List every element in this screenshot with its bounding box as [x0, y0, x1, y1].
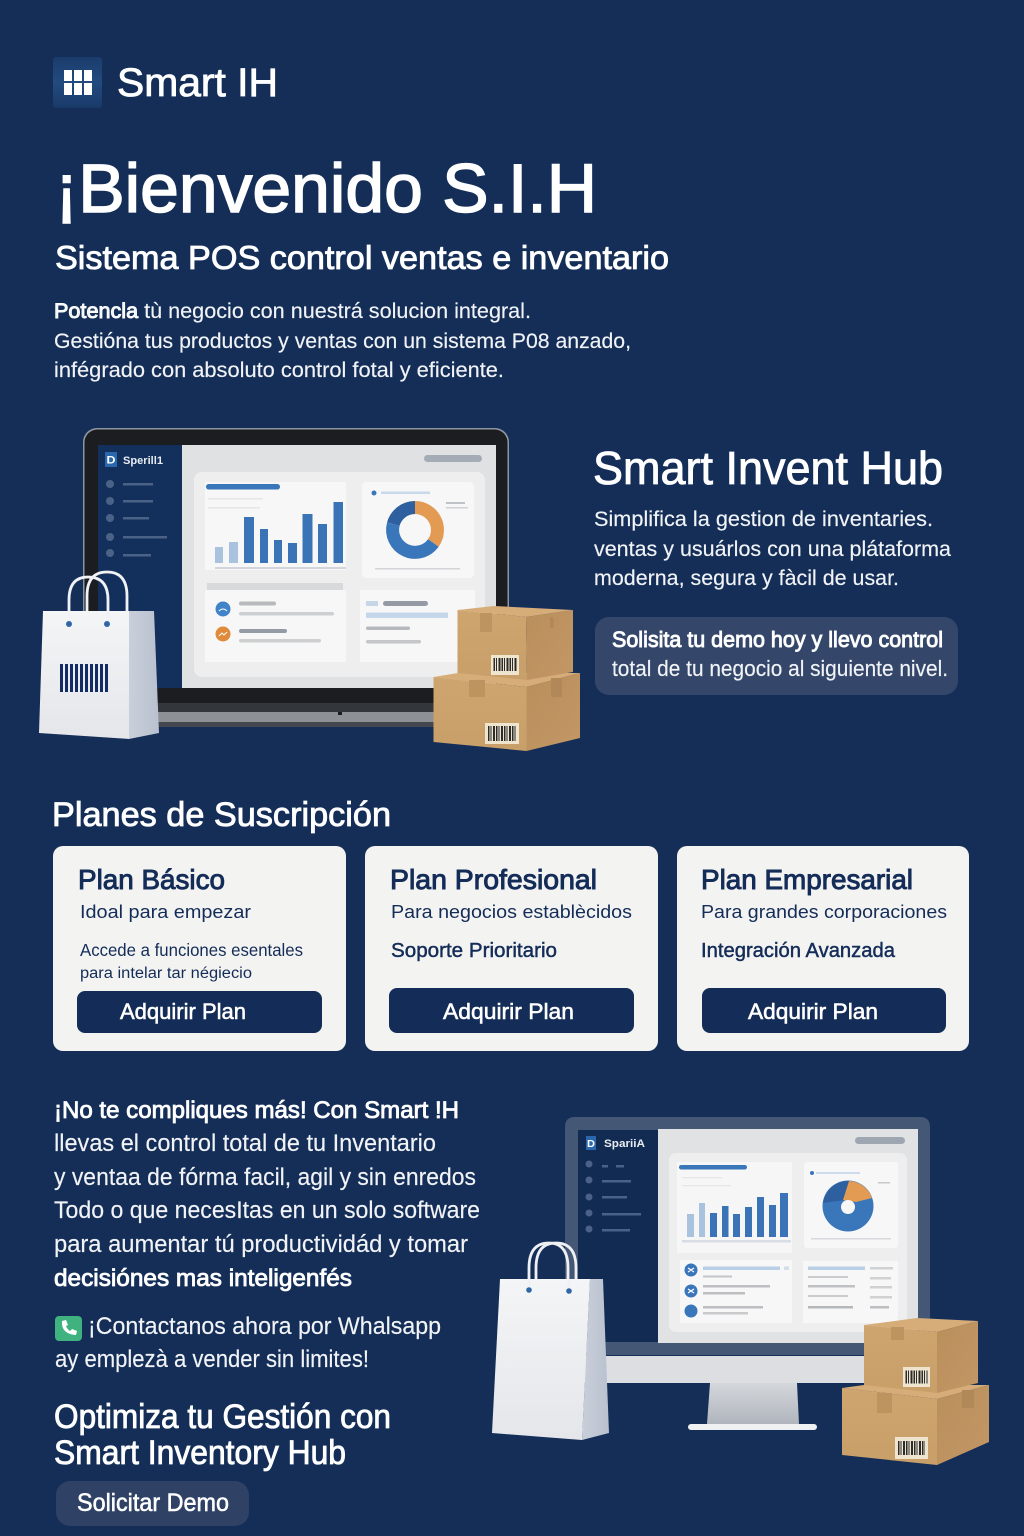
- header: logo and brand: [53, 57, 278, 108]
- shopping bag with barcode: [39, 572, 159, 739]
- panel: Plan Básico: para intelar tar négiecio: [80, 965, 252, 982]
- heading: optimize: Optimiza tu Gestión con: [54, 1398, 391, 1436]
- callout: [595, 617, 958, 695]
- icon: grid logo: [53, 57, 102, 108]
- description: [594, 508, 951, 590]
- callout: total de tu negocio al siguiente nivel.: [612, 656, 948, 681]
- illustration: desktop monitor with bag and boxes: [492, 1117, 989, 1465]
- laptop: [83, 428, 509, 727]
- button: request demo: Solicitar Demo: [77, 1489, 229, 1517]
- monitor sidebar: SpariiA: [604, 1138, 645, 1150]
- button: [702, 988, 946, 1033]
- panel: Plan Empresarial: Plan Empresarial: [701, 864, 913, 895]
- heading: subscription plans: Planes de Suscripción: [52, 796, 391, 834]
- laptop sidebar: Sperill1: [123, 455, 163, 467]
- donut chart: [362, 482, 474, 578]
- text block: closing message: ¡No te compliques más! Con Smart !H: [54, 1097, 459, 1124]
- title: ¡Bienvenido S.I.H: [55, 150, 597, 227]
- intro paragraph: Gestióna tus productos y ventas con un sistema P08 anzado,: [54, 330, 631, 353]
- stacked cardboard boxes: [842, 1318, 989, 1465]
- laptop screen dashboard: [182, 445, 496, 688]
- button: Adquirir Plan: [748, 999, 878, 1024]
- brand name: Smart IH: [117, 61, 278, 105]
- intro paragraph: [54, 300, 631, 382]
- monitor screen dashboard: [658, 1129, 918, 1343]
- button: [389, 988, 634, 1033]
- callout: Solisita tu demo hoy y llevo control: [612, 627, 943, 652]
- panel: Plan Profesional: Soporte Prioritario: [391, 940, 557, 962]
- panel: Plan Básico: [53, 846, 346, 1051]
- panel: Plan Básico: Plan Básico: [78, 864, 225, 895]
- intro paragraph: Potencla tù negocio con nuestrá solucion integral.: [54, 300, 531, 323]
- monitor sidebar: D: [587, 1139, 595, 1150]
- illustration: laptop with bag and boxes: [39, 428, 580, 751]
- contact line: [55, 1313, 441, 1373]
- button: Adquirir Plan: [120, 999, 246, 1024]
- panel: Plan Profesional: Para negocios establècidos: [391, 901, 632, 922]
- subtitle: Sistema POS control ventas e inventario: [55, 239, 669, 276]
- text block: closing message: Todo o que necesItas en un solo software: [54, 1197, 480, 1224]
- contact line: ay emplezà a vender sin limites!: [55, 1346, 369, 1373]
- heading: optimize: [54, 1398, 391, 1472]
- description: Simplifica la gestion de inventaries.: [594, 508, 933, 531]
- panel: Smart Invent Hub intro: [593, 442, 958, 695]
- panel: Plan Empresarial: Para grandes corporaciones: [701, 901, 947, 922]
- text block: closing message: decisiónes mas inteligenfés: [54, 1265, 352, 1292]
- description: moderna, segura y fàcil de usar.: [594, 567, 899, 590]
- panel: Plan Empresarial: [677, 846, 969, 1051]
- button: [77, 991, 322, 1033]
- laptop sidebar: D: [106, 454, 116, 466]
- button: Adquirir Plan: [443, 999, 574, 1024]
- text block: closing message: para aumentar tú productividád y tomar: [54, 1231, 468, 1258]
- text block: closing message: llevas el control total de tu Inventario: [54, 1130, 436, 1157]
- panel: Plan Básico: Accede a funciones esentales: [80, 940, 303, 960]
- activity list: [205, 583, 346, 662]
- intro paragraph: infégrado con absoluto control fotal y eficiente.: [54, 359, 504, 382]
- summary list: [803, 1261, 898, 1323]
- heading: optimize: Smart Inventory Hub: [54, 1434, 346, 1472]
- icon: WhatsApp phone: [55, 1316, 82, 1341]
- description: ventas y usuárlos con una plátaforma: [594, 538, 951, 561]
- stacked cardboard boxes: [434, 606, 580, 751]
- text block: closing message: y ventaa de fórma facil, agil y sin enredos: [54, 1164, 476, 1191]
- monitor sidebar: [578, 1130, 658, 1342]
- panel: Plan Empresarial: Integración Avanzada: [701, 940, 896, 962]
- heading: Smart Invent Hub: [593, 442, 943, 494]
- activity list: [680, 1260, 792, 1323]
- panel: Plan Profesional: Plan Profesional: [390, 864, 597, 895]
- monitor: [565, 1117, 930, 1430]
- barcode: [60, 664, 110, 692]
- pie chart: [804, 1162, 898, 1248]
- summary list: [360, 590, 475, 662]
- panel: Plan Básico: Idoal para empezar: [80, 901, 251, 922]
- laptop sidebar: [98, 445, 182, 688]
- bar chart: [677, 1162, 792, 1253]
- panel: Plan Profesional: [365, 846, 658, 1051]
- bar chart: [205, 482, 346, 570]
- shopping bag: [492, 1243, 609, 1440]
- contact line: ¡Contactanos ahora por Whalsapp: [88, 1313, 441, 1340]
- text block: closing message: [54, 1097, 480, 1292]
- button: request demo: [56, 1481, 249, 1526]
